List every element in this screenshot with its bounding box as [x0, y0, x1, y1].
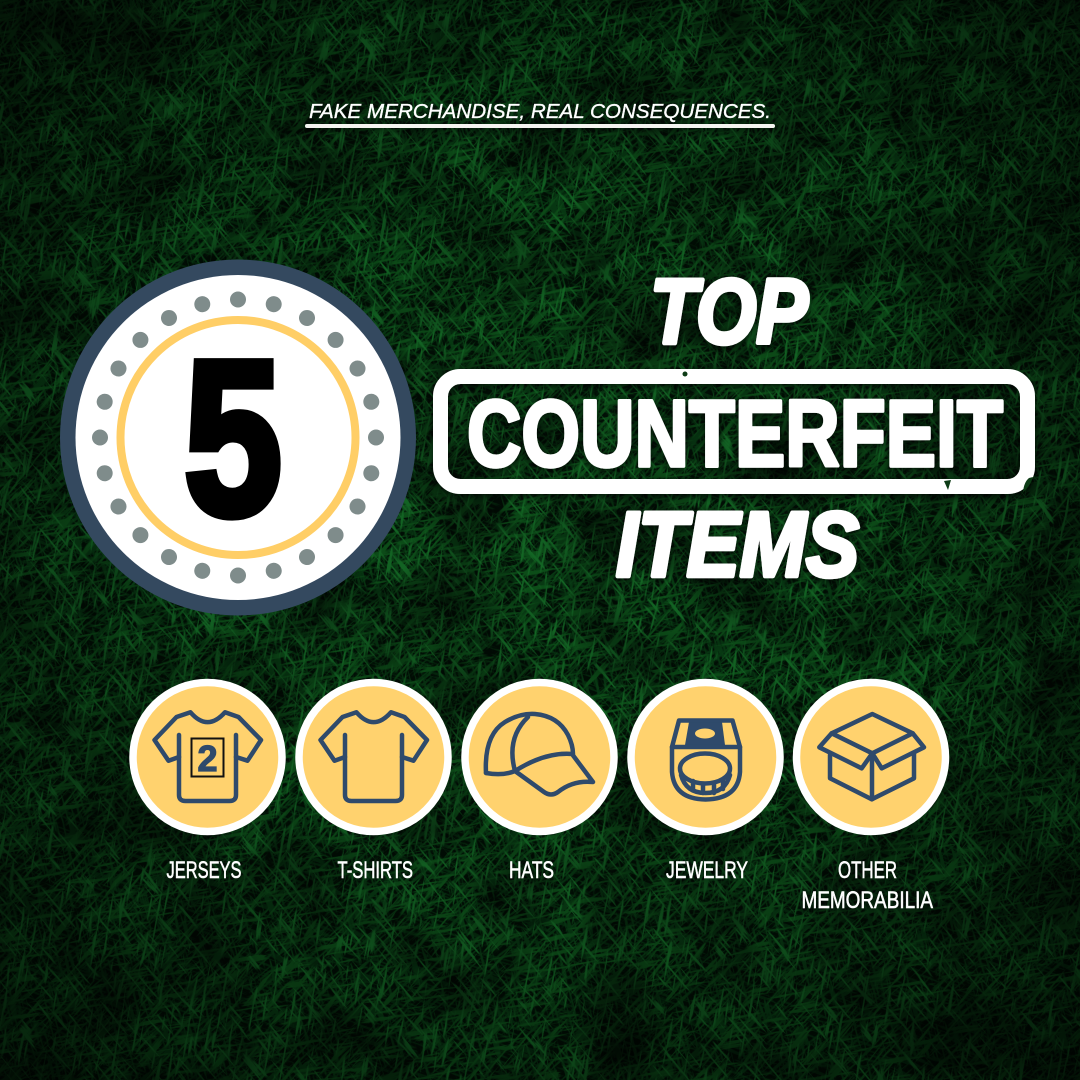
badge: number 5 — [60, 260, 416, 616]
title word: items: ITEMS — [616, 494, 859, 596]
t-shirts label: T-SHIRTS — [338, 857, 413, 884]
item: hats — [465, 682, 614, 884]
item: jewelry — [631, 682, 780, 884]
title frame — [440, 372, 1033, 492]
icon: jersey: 2 — [197, 738, 218, 779]
item: jerseys — [133, 682, 282, 884]
item: other memorabilia — [796, 682, 946, 914]
jewelry circle — [631, 682, 780, 832]
tagline with underline — [305, 100, 775, 128]
badge navy outer ring — [60, 260, 416, 616]
tagline text: FAKE MERCHANDISE, REAL CONSEQUENCES. — [309, 100, 771, 123]
jerseys circle — [133, 682, 282, 832]
title block — [440, 261, 1033, 596]
jerseys label: JERSEYS — [166, 857, 242, 884]
hats label: HATS — [509, 857, 554, 884]
badge numeral: 5 — [184, 316, 282, 561]
icon: championship ring — [672, 720, 740, 800]
icon: open box — [819, 714, 924, 799]
hats circle — [465, 682, 614, 832]
memorabilia label — [802, 857, 933, 914]
memorabilia label: OTHER — [838, 857, 897, 884]
badge white face — [76, 275, 400, 600]
tagline underline — [305, 124, 775, 128]
title word: top: TOP — [650, 261, 809, 363]
icon: t-shirt — [320, 712, 427, 801]
icon: cap — [486, 714, 593, 794]
icon: jersey — [154, 712, 261, 801]
badge dot ring — [92, 292, 384, 584]
item: t-shirts — [299, 682, 448, 884]
jewelry label: JEWELRY — [666, 857, 748, 884]
memorabilia label: MEMORABILIA — [802, 887, 933, 914]
badge gold ring — [120, 320, 356, 555]
memorabilia circle — [796, 682, 946, 832]
t-shirts circle — [299, 682, 448, 832]
